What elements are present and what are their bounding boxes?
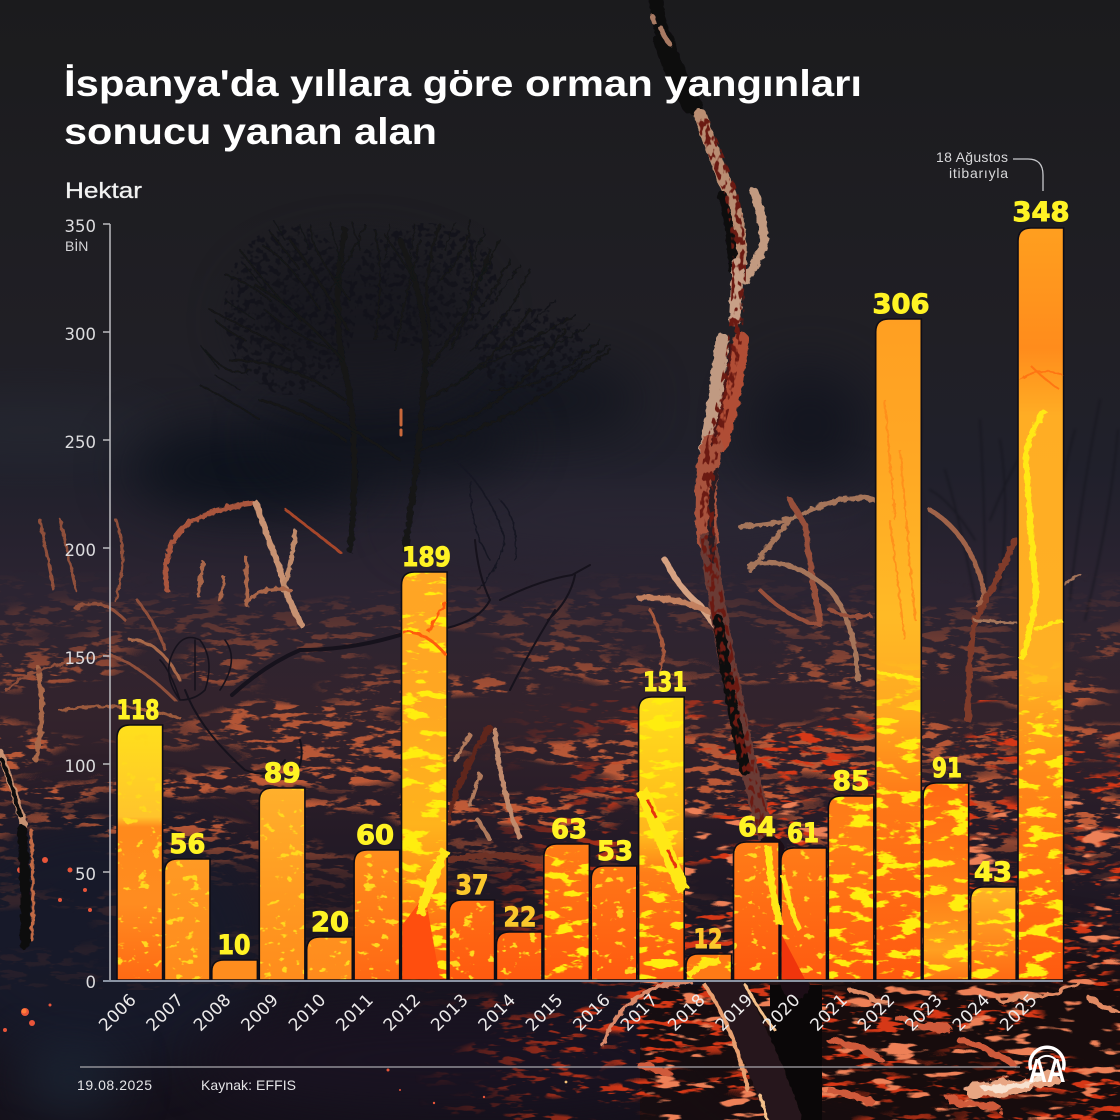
annotation: date note	[936, 149, 1043, 191]
bar 2014: 22: 22	[504, 902, 536, 933]
bar 2006: 118: 118	[116, 695, 160, 726]
bar 2009: 89	[259, 758, 305, 980]
bar 2016: 53	[591, 836, 637, 980]
x axis year labels: 2025	[996, 990, 1042, 1036]
x axis year labels: 2017	[617, 990, 662, 1036]
charred branches	[0, 498, 1080, 945]
x axis year labels: 2015	[522, 990, 567, 1036]
unit label: Hektar	[65, 178, 142, 203]
y axis: 250	[64, 433, 96, 452]
bar 2011: 60: 60	[356, 820, 394, 851]
y axis	[64, 217, 110, 992]
x axis year labels	[95, 990, 1042, 1036]
icon: AA logo: AA	[1028, 1052, 1066, 1089]
bar 2018: 12: 12	[694, 924, 722, 955]
y axis: 350	[64, 217, 96, 236]
x axis year labels: 2024	[949, 990, 994, 1036]
annotation: date note: 18 Ağustos	[936, 149, 1008, 165]
y axis: 200	[64, 541, 96, 560]
bar 2023: 91: 91	[932, 753, 962, 784]
bar 2007: 56	[164, 829, 210, 980]
bar 2008: 10: 10	[218, 930, 250, 961]
title: İspanya'da yıllara göre orman yangınları	[64, 63, 862, 104]
central burnt trunk	[603, 0, 795, 1120]
bar 2023: 91	[923, 753, 969, 980]
bar 2014: 22	[496, 902, 542, 980]
bar 2020: 61: 61	[787, 818, 819, 849]
y axis: 100	[64, 757, 96, 776]
x axis year labels: 2020	[759, 990, 804, 1036]
bar 2024: 43	[971, 857, 1016, 980]
x axis year labels: 2018	[664, 990, 710, 1036]
bar 2013: 37: 37	[456, 870, 488, 901]
x axis year labels: 2009	[238, 990, 283, 1036]
bar 2012: 189	[402, 542, 451, 980]
bar 2021: 85: 85	[832, 766, 870, 797]
y axis: 150	[64, 649, 96, 668]
x axis year labels: 2021	[807, 990, 852, 1036]
burning branches seen through bars	[402, 365, 1062, 979]
bar 2025: 348: 348	[1012, 197, 1070, 228]
tree silhouette	[130, 220, 640, 590]
y axis: 0	[86, 973, 96, 992]
x axis year labels: 2010	[285, 990, 330, 1036]
x axis baseline	[103, 980, 1063, 982]
bar 2020: 61	[781, 818, 826, 980]
x axis year labels: 2016	[569, 990, 615, 1036]
x axis year labels: 2022	[854, 990, 899, 1036]
x axis year labels: 2012	[380, 990, 425, 1036]
bar 2009: 89: 89	[264, 758, 301, 789]
y axis: 50	[75, 865, 96, 884]
x axis year labels: 2011	[332, 990, 378, 1036]
y axis: 300	[64, 325, 96, 344]
bar 2022: 306: 306	[872, 289, 930, 320]
bar 2015: 63: 63	[551, 814, 587, 845]
x axis year labels: 2019	[712, 990, 757, 1036]
bar 2010: 20	[307, 907, 352, 980]
bar 2016: 53: 53	[597, 836, 633, 867]
bar 2010: 20: 20	[311, 907, 349, 938]
bar 2019: 64	[734, 812, 779, 980]
x axis year labels: 2008	[190, 990, 235, 1036]
bar 2019: 64: 64	[738, 812, 776, 843]
bar 2022: 306	[872, 289, 930, 980]
y axis: BİN	[65, 237, 88, 254]
distant bare shrubs right	[930, 400, 1118, 620]
bar 2011: 60	[354, 820, 400, 980]
chart: bars with values	[116, 197, 1070, 980]
bar 2018: 12	[686, 924, 732, 980]
bar 2013: 37	[449, 870, 495, 980]
annotation: date note: itibarıyla	[949, 165, 1008, 181]
bar 2015: 63	[544, 814, 589, 980]
bar 2021: 85	[828, 766, 874, 980]
x axis year labels: 2007	[143, 990, 188, 1036]
x axis year labels: 2006	[95, 990, 141, 1036]
bar 2025: 348	[1012, 197, 1070, 980]
bar 2017: 131: 131	[643, 667, 687, 698]
burning ground embers	[0, 570, 1120, 1120]
title: sonucu yanan alan	[64, 111, 437, 152]
bar 2017: 131	[639, 667, 687, 980]
ember on tree	[400, 410, 402, 435]
x axis year labels: 2013	[427, 990, 473, 1036]
bar 2012: 189: 189	[402, 542, 451, 573]
bar 2007: 56: 56	[169, 829, 205, 860]
footer: date: 19.08.2025	[77, 1077, 152, 1093]
x axis year labels: 2023	[901, 990, 947, 1036]
bar 2024: 43: 43	[974, 857, 1012, 888]
bar 2008: 10	[212, 930, 257, 980]
x axis year labels: 2014	[475, 990, 520, 1036]
footer: source: Kaynak: EFFIS	[201, 1077, 296, 1093]
bar 2006: 118	[116, 695, 163, 980]
left charred stump	[0, 752, 33, 945]
footer line	[80, 1066, 1020, 1068]
title	[64, 63, 862, 152]
